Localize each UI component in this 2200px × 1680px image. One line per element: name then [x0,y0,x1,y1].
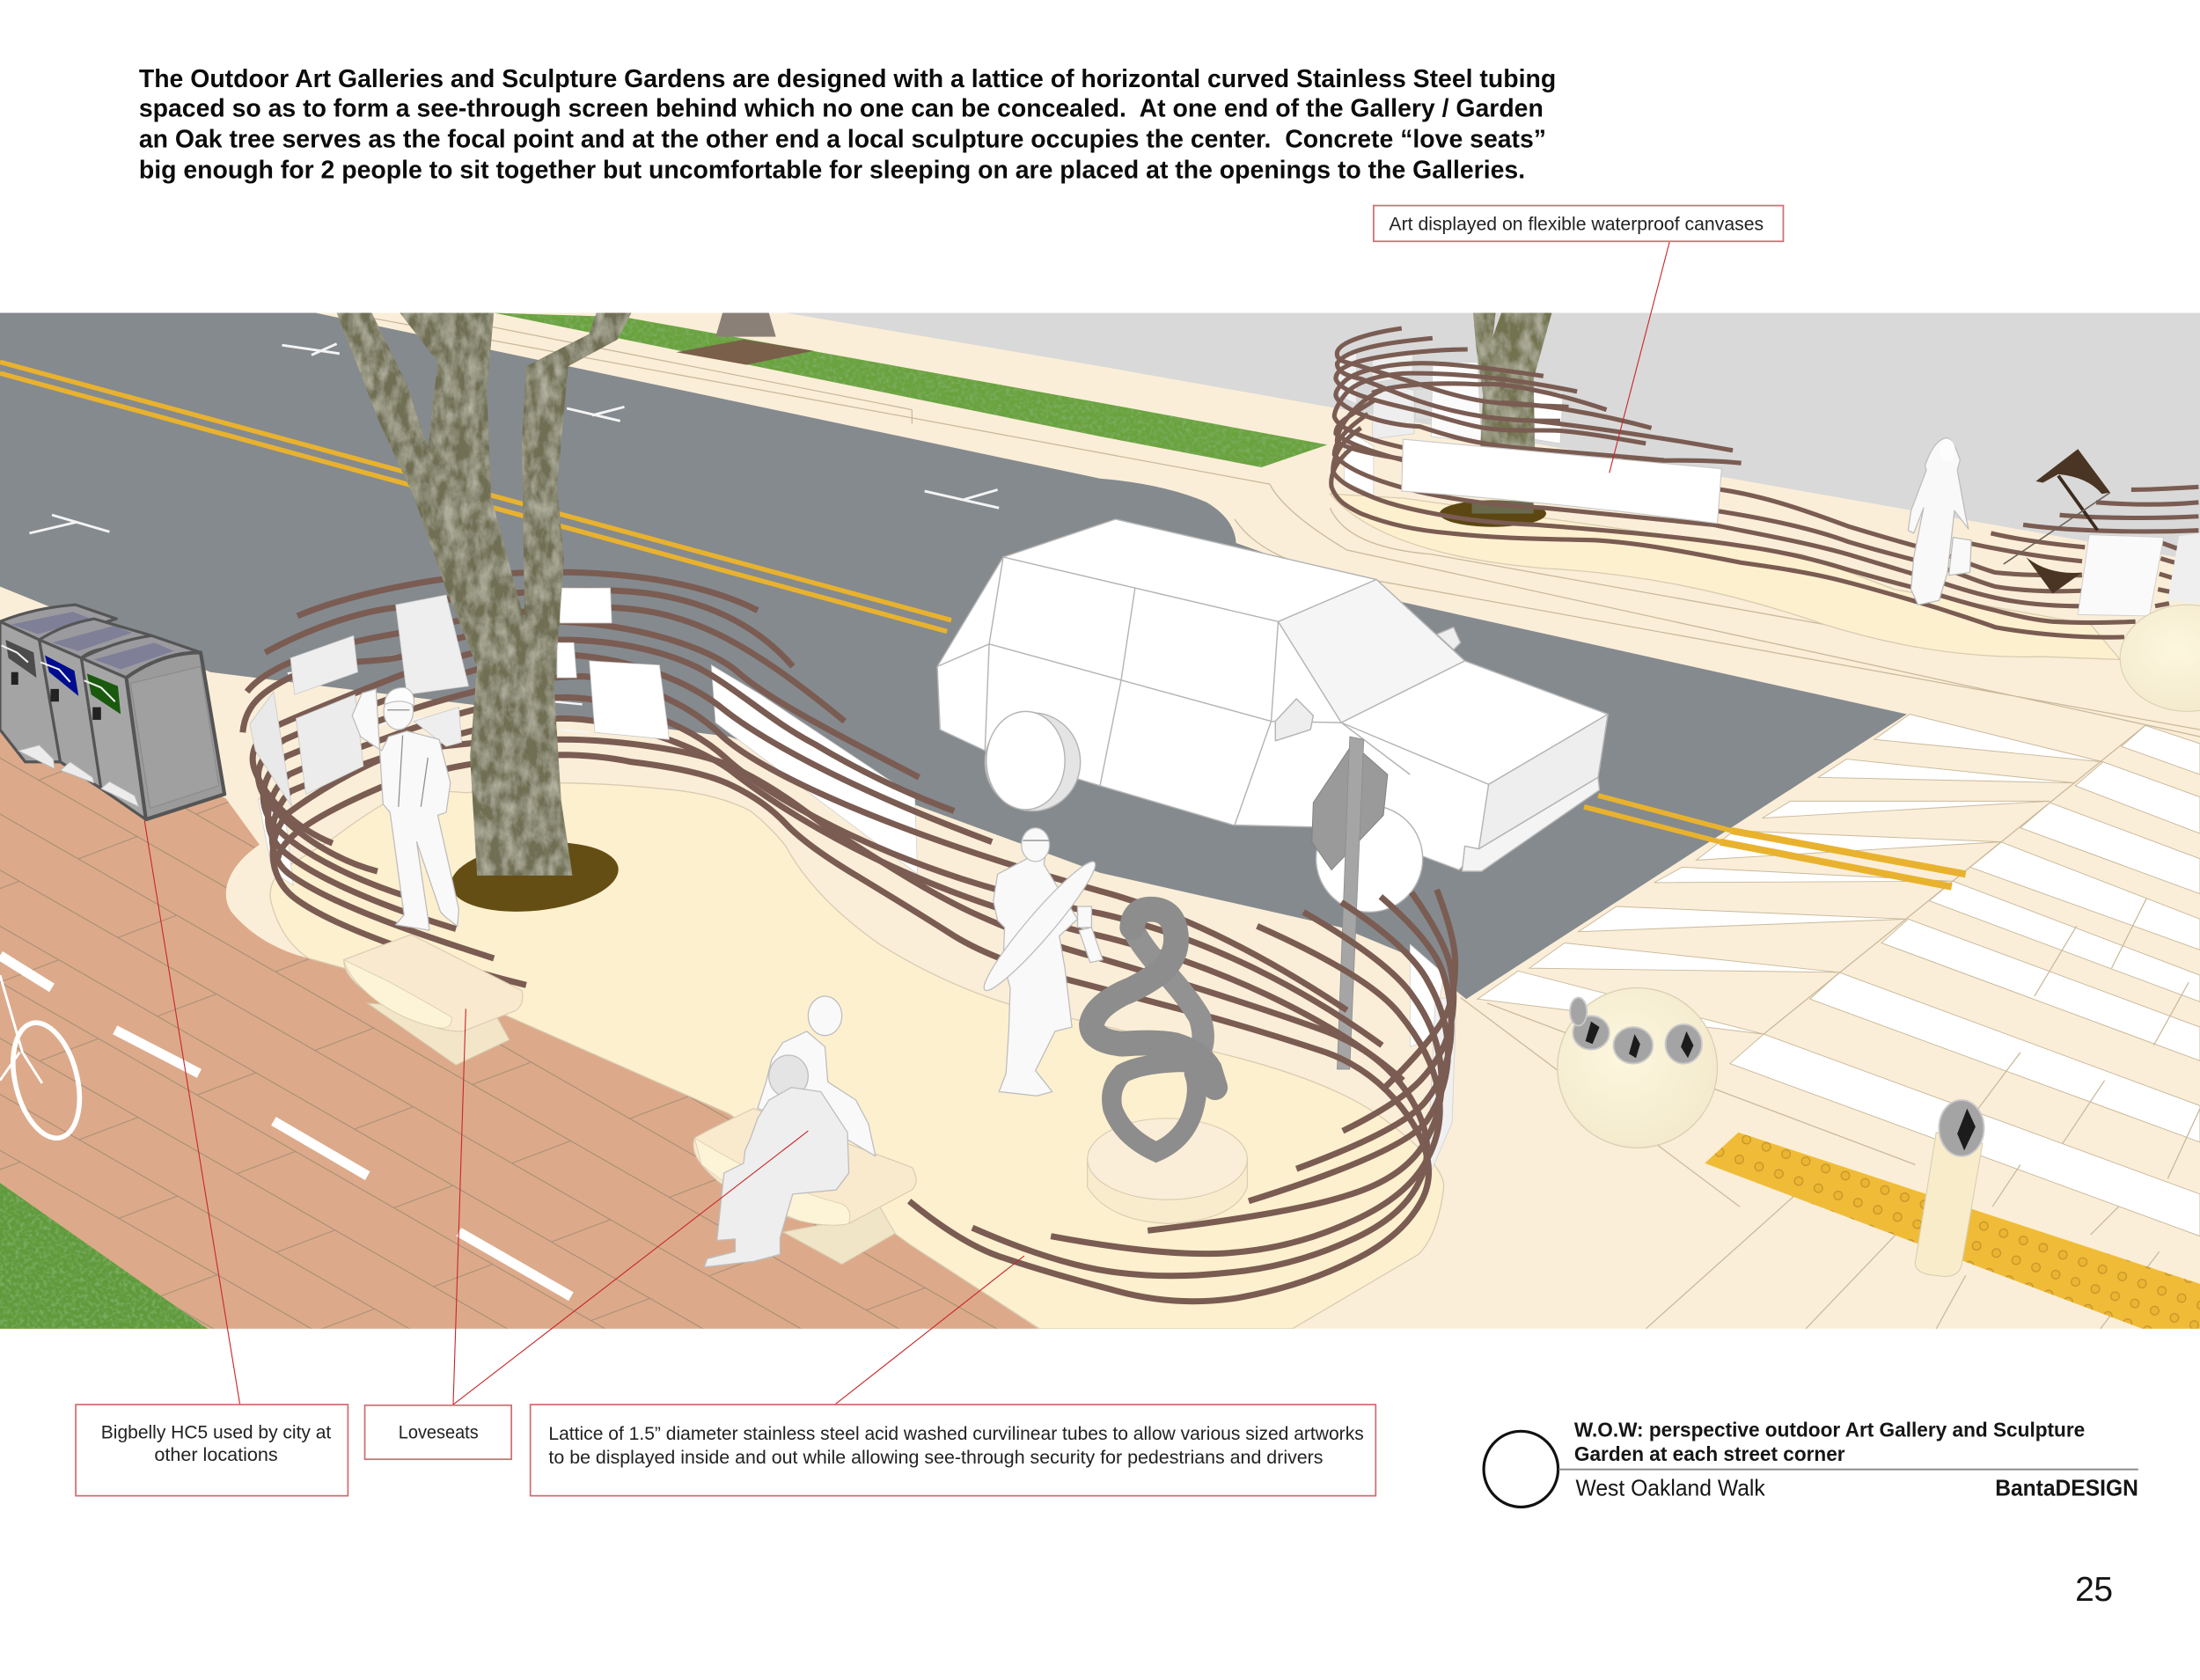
code [11,672,18,685]
intro heading text: big enough for 2 people to sit together but uncomfortable for sleeping on are placed at the openings to the Galleries. [139,156,1525,184]
post [1915,1133,1983,1276]
woman figure [1908,437,1971,605]
pole [2004,493,2110,564]
car bumper [1462,777,1600,871]
man with skateboard [975,828,1104,1096]
yellow center lines [0,362,1966,887]
rear wheel [985,713,1081,811]
bench seat [693,1109,916,1225]
code [50,689,59,701]
brown tree pit far [676,340,814,365]
panel [52,626,132,651]
bench leg [783,1207,895,1265]
callout: loveseats: Loveseats [399,1420,479,1442]
face [40,640,101,789]
callout: canvases [1374,206,1783,241]
far canvas edge [2167,533,2200,604]
car panel lines [937,557,1410,825]
callout: bigbelly: other locations [154,1443,278,1465]
code [92,708,101,720]
near gallery art panels [250,588,670,807]
panel [94,642,174,670]
glasses and shirt lines [387,710,428,807]
title block [1484,1419,2138,1507]
bench near tree [344,935,523,1065]
small grass behind bins [0,656,12,701]
callout: bigbelly: Bigbelly HC5 used by city at [101,1420,331,1442]
car front [1478,715,1608,849]
glasses [1023,840,1050,841]
front person head [769,1055,808,1097]
car hood [1341,661,1608,784]
top [0,605,116,640]
bicycle [0,975,91,1145]
paving joint lines [1461,725,2200,1329]
callout: bigbelly [76,1405,348,1496]
descending strand [1133,928,1203,1053]
callout: lattice [531,1405,1375,1496]
strut [2058,476,2098,531]
parked car [937,519,1608,912]
face [0,621,61,762]
stop sign [1312,737,1388,1069]
near gallery pit [447,834,622,920]
far oak tree [1473,313,1551,451]
rear wheel face [986,711,1065,810]
callout: loveseats [365,1405,511,1459]
panel [11,612,92,635]
front seated person [704,1088,849,1267]
head [1022,828,1050,862]
dress and arms [1908,437,1969,605]
sculpture pedestal [1088,1119,1247,1223]
far tree base [1472,501,1534,514]
far lattice tubes [1331,328,2198,637]
gallery pad, near corner [270,783,1444,1329]
intro heading text [139,65,1556,184]
bin 1 [0,605,116,762]
crosswalk bands [1730,725,2200,1236]
firm name: BantaDESIGN [1995,1477,2138,1501]
bin flaps [18,745,139,807]
wheel [2,1016,91,1145]
bench with couple [693,996,916,1267]
title text: W.O.W: perspective outdoor Art Gallery and Sculpture [1574,1419,2085,1442]
intro heading text: The Outdoor Art Galleries and Sculpture Gardens are designed with a lattice of horizontal curved Stainless Steel tubing [139,65,1556,93]
main strand [1091,909,1215,1088]
ball seat with reflective inserts [1558,987,1718,1148]
face [81,658,146,819]
green planting strip [494,313,1327,467]
car body [937,519,1608,870]
far tree pit [1440,500,1546,527]
side inset [130,666,219,808]
far white canvas right [2078,534,2164,616]
intro heading text: an Oak tree serves as the focal point and at the other end a local sculpture occupies the center. Concrete “love seats” [139,125,1546,153]
crosswalk triangles [1478,715,2103,1034]
bin 3 [81,635,224,819]
top [40,619,151,658]
far curb lines [344,313,2200,737]
seat front edge [344,960,451,1028]
reflections [1586,1022,1693,1058]
base side [1088,1159,1247,1223]
far car mirror [1437,627,1461,649]
body [994,840,1077,1096]
skateboard [975,854,1104,998]
bag [1079,928,1103,963]
top [1088,1119,1247,1199]
face [1940,439,1955,462]
parking marks [29,344,999,533]
project name: West Oakland Walk [1575,1477,1765,1501]
label [45,656,78,696]
bench leg [368,1003,510,1065]
bin squiggles [2,645,115,701]
bag [1949,538,1971,576]
bench seat [344,935,523,1031]
road asphalt [0,313,1907,999]
twisted sculpture [1091,909,1215,1152]
label [5,640,36,678]
reflection [1957,1109,1976,1150]
hair [385,687,414,706]
frame [0,975,42,1083]
bike lane dashes [0,956,571,1296]
perspective street scene [0,313,2200,1329]
man with raised arm [352,687,458,930]
near gallery back white canvases [258,665,1456,1182]
intro heading text: spaced so as to form a see-through screen behind which no one can be concealed. At one end of the Gallery / Garden [139,94,1544,122]
sign plate [1312,744,1388,870]
title rule [1558,1469,2138,1471]
head [384,693,414,730]
car windshield [1278,579,1465,723]
title circle [1484,1431,1558,1507]
top [81,635,201,678]
far main canvas [1402,439,1721,524]
near oak tree [337,313,631,876]
lower sail [2026,557,2082,593]
recycling bins [0,605,224,819]
page number: 25 [2075,1571,2113,1609]
seat front edge [694,1138,850,1225]
tactile yellow strip [1705,1133,2200,1329]
road markings seen through lattice [288,654,590,732]
grass lower left [0,1183,208,1329]
far ball seat [2120,605,2200,711]
top sail [2035,449,2110,494]
top [1939,1100,1984,1156]
kite sculpture [2004,449,2110,593]
callout lines [144,241,1669,1405]
side [126,652,224,819]
callout: lattice: to be displayed inside and out while allowing see-through security for pedestrians and drivers [548,1446,1324,1468]
lower loop [1111,1062,1197,1152]
bin 2 [40,619,151,789]
label [87,673,121,715]
far side gray building area [786,313,2200,561]
far gallery pad [1330,494,2120,659]
back seated person [758,1031,876,1156]
inserts [1573,1016,1610,1050]
cup [1077,906,1091,928]
back person head [808,996,842,1036]
front wheel [1316,805,1423,912]
sphere [1558,987,1718,1148]
brick bike path [0,703,1038,1329]
far tree trunk [715,313,776,337]
body [352,689,458,930]
far gallery art panels [1338,349,1563,495]
bollard [1915,1100,1984,1276]
ground: sidewalk cream base [0,313,2200,1329]
car mirrors [1275,699,1313,741]
title block: Garden at each street corner [1574,1442,1845,1465]
callout: canvases: Art displayed on flexible waterproof canvases [1389,212,1764,234]
callout: lattice: Lattice of 1.5” diameter stainless steel acid washed curvilinear tubes to allow various sized artworks [548,1422,1364,1444]
near lattice tubes [243,572,1456,1302]
sign pole [1337,737,1364,1069]
